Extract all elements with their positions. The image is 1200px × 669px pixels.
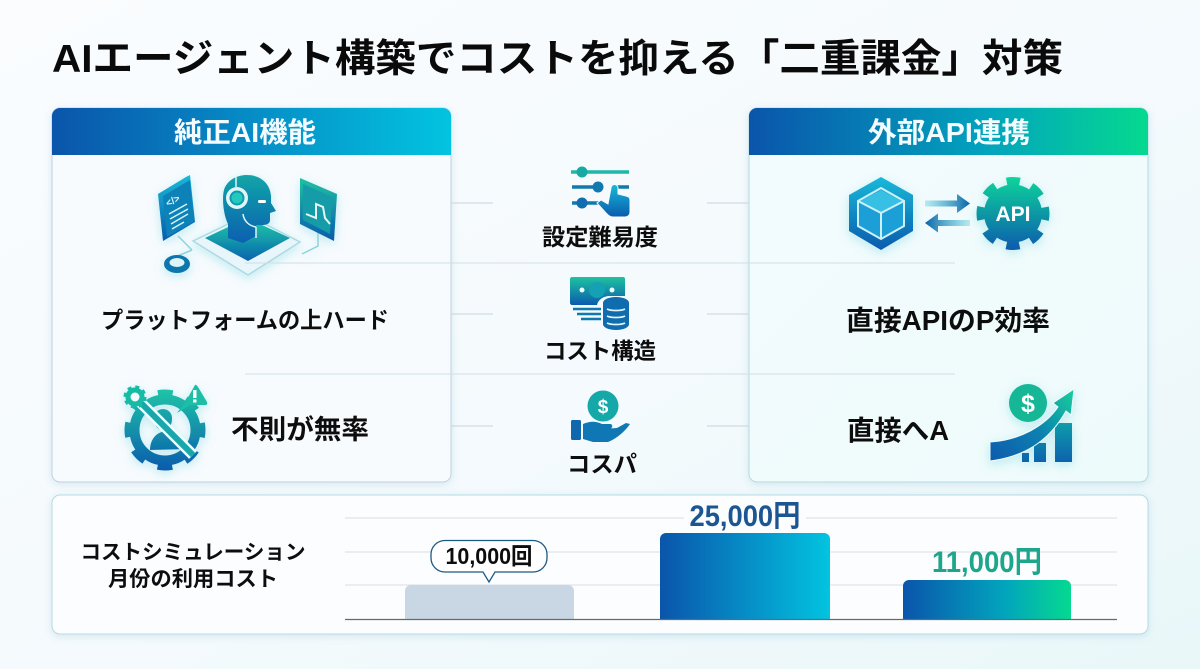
panel: コストシミュレーション — [52, 495, 1148, 634]
bar chart — [345, 500, 1117, 620]
column: comparison items — [542, 166, 658, 477]
icon: exchange arrows — [925, 194, 970, 232]
icon: API gear — [981, 182, 1045, 246]
icon: API gear: API — [995, 203, 1031, 226]
icon: rising cost chart — [990, 384, 1074, 462]
bar: 11,000円 — [903, 580, 1071, 619]
chart heading: コストシミュレーション — [80, 541, 306, 564]
icon: rising cost chart: $ — [1021, 390, 1035, 418]
text: 設定難易度: 設定難易度 — [542, 224, 658, 250]
panel: 純正AI機能 — [52, 108, 451, 482]
value label: 11,000円: 11,000円 — [932, 546, 1042, 579]
text: プラットフォームの上ハード: プラットフォームの上ハード — [101, 307, 389, 333]
icon: banknote and coins — [570, 277, 629, 330]
icon: sliders with hand — [571, 166, 630, 217]
icon: AI head on platform: </> — [164, 193, 182, 210]
bar: 10,000回 — [405, 585, 574, 619]
icon: AI head on platform — [158, 175, 337, 275]
panel header: 外部API連携: 外部API連携 — [868, 117, 1030, 148]
icon: hand holding coin — [571, 390, 630, 442]
text: 不則が無率: 不則が無率 — [231, 414, 369, 445]
chart heading second line: 月份の利用コスト — [108, 568, 278, 591]
icon: cube — [849, 177, 913, 250]
text: 直接へA: 直接へA — [847, 415, 949, 446]
title: AIエージェント構築でコストを抑える「二重課金」対策 — [52, 38, 1063, 81]
text: コスト構造: コスト構造 — [544, 339, 656, 364]
callout: 10,000回: 10,000回 — [446, 543, 532, 569]
icon: hand holding coin: $ — [598, 397, 609, 418]
text: コスパ: コスパ — [567, 451, 637, 477]
panel header: 外部API連携 — [749, 108, 1148, 155]
text: 直接APIのP効率: 直接APIのP効率 — [846, 305, 1050, 336]
panel header: 純正AI機能 — [52, 108, 451, 155]
icon: gear with warning — [125, 385, 207, 466]
panel header: 純正AI機能: 純正AI機能 — [174, 117, 316, 148]
bar: 25,000円 — [660, 533, 830, 619]
callout: 10,000回 — [431, 540, 547, 582]
value label: 25,000円: 25,000円 — [690, 500, 800, 533]
panel: 外部API連携 — [749, 108, 1148, 482]
connector lines — [245, 203, 955, 426]
